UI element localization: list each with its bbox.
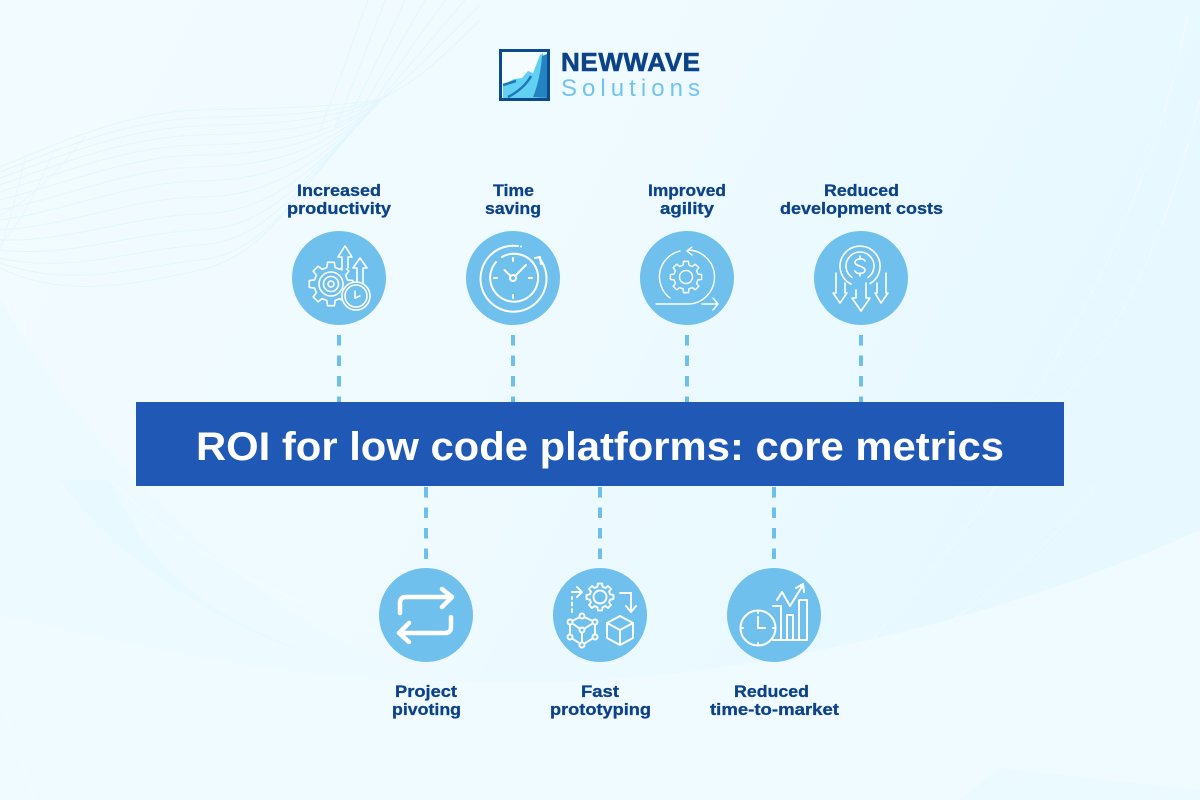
label	[710, 682, 839, 719]
logo mark	[500, 50, 548, 100]
icon: clock with circular arrow	[466, 231, 560, 325]
label: time-to-market	[710, 700, 839, 719]
label: Reduced	[824, 181, 899, 200]
logo	[500, 47, 700, 102]
label: Project	[395, 682, 457, 701]
label	[392, 682, 461, 719]
metric: Increased productivity	[287, 181, 392, 325]
label: Increased	[297, 181, 381, 200]
label: prototyping	[550, 700, 651, 719]
icon: swap arrows	[379, 568, 473, 662]
label: Reduced	[734, 682, 809, 701]
banner title: ROI for low code platforms: core metrics	[196, 425, 1004, 469]
icon: clock and bar chart	[727, 568, 821, 662]
metric: Reduced development costs	[780, 181, 943, 325]
label: pivoting	[392, 700, 461, 719]
metric: Reduced time-to-market	[710, 568, 839, 719]
label: saving	[485, 199, 541, 218]
icon: gear, arrows and clock	[292, 231, 386, 325]
connector lines	[339, 335, 861, 568]
label: Fast	[581, 682, 619, 701]
icon: gear, mesh cube and box	[553, 568, 647, 662]
metric: Fast prototyping	[550, 568, 651, 719]
icon: dollar coin with down arrows	[814, 231, 908, 325]
logo wordmark	[561, 47, 700, 102]
label	[648, 181, 726, 218]
metric: Improved agility	[640, 181, 734, 325]
label	[485, 181, 541, 218]
banner	[136, 402, 1064, 486]
label: productivity	[287, 199, 392, 218]
decorative wave lines	[0, 0, 480, 286]
label	[550, 682, 651, 719]
metric: Project pivoting	[379, 568, 473, 719]
metric: Time saving	[466, 181, 560, 325]
label	[780, 181, 943, 218]
label	[287, 181, 392, 218]
logo wordmark: Solutions	[561, 75, 700, 102]
label: Improved	[648, 181, 726, 200]
logo wordmark: NEWWAVE	[561, 47, 700, 77]
label: agility	[660, 199, 715, 218]
label: development costs	[780, 199, 943, 218]
icon: gear in cycle arrow	[640, 231, 734, 325]
label: Time	[493, 181, 534, 200]
